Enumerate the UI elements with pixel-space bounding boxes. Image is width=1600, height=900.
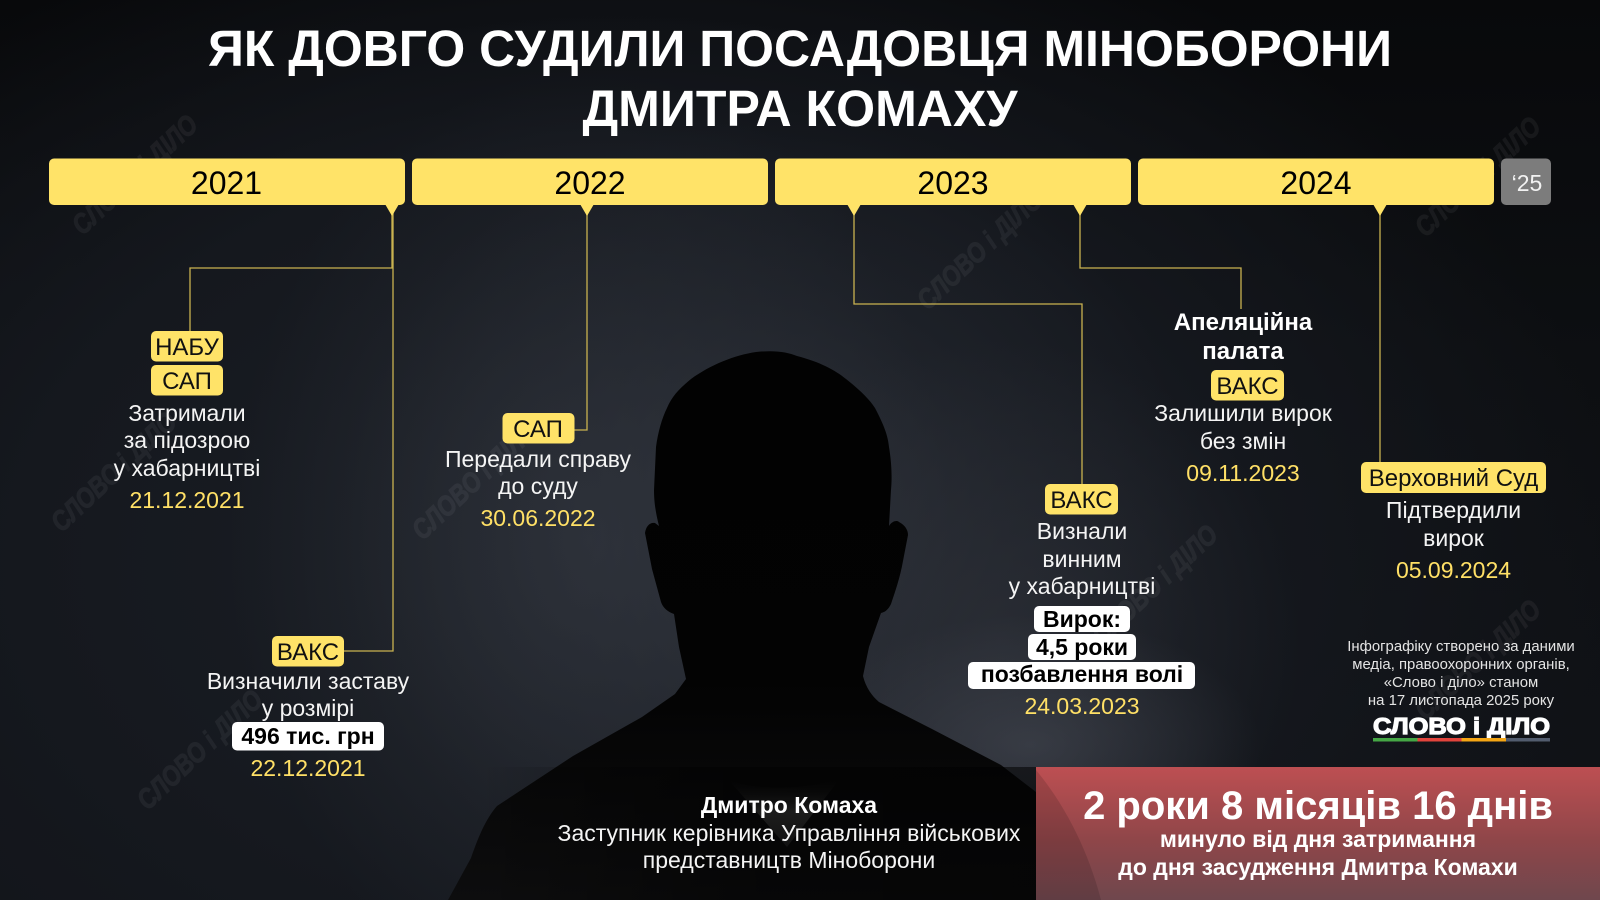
timeline bar: 2023	[775, 158, 1131, 216]
timeline bar: 2021: 2021	[191, 165, 262, 201]
event: bail 22.12.2021: 22.12.2021	[250, 755, 366, 781]
watermarks	[45, 109, 1547, 816]
silhouette of the official	[448, 351, 1036, 900]
event: appeal 09.11.2023: 09.11.2023	[1186, 460, 1300, 486]
event: verdict 24.03.2023: ВАКС	[1050, 487, 1113, 514]
source note: «Слово і діло» станом	[1384, 675, 1538, 691]
watermarks: СЛОВО і ДІЛО	[131, 684, 269, 816]
event: case sent to court 30.06.2022: САП	[513, 416, 563, 443]
event: bail 22.12.2021: ВАКС	[277, 639, 339, 666]
panel: duration callout: 2 роки 8 місяців 16 днів	[1083, 784, 1553, 828]
event: bail 22.12.2021: у розмірі	[262, 695, 354, 721]
watermarks: СЛОВО і ДІЛО	[1086, 519, 1224, 651]
event: detained 21.12.2021: САП	[162, 368, 212, 395]
event: appeal 09.11.2023: без змін	[1200, 428, 1286, 454]
event: verdict 24.03.2023: позбавлення волі	[981, 661, 1183, 687]
event: detained 21.12.2021: у хабарництві	[114, 455, 260, 481]
event: Supreme Court 05.09.2024: вирок	[1423, 525, 1485, 551]
event: case sent to court 30.06.2022	[445, 413, 632, 531]
watermarks: СЛОВО і ДІЛО	[1409, 111, 1547, 243]
event: verdict 24.03.2023: 4,5 роки	[1036, 634, 1128, 660]
event: Supreme Court 05.09.2024: 05.09.2024	[1396, 557, 1511, 583]
event: appeal 09.11.2023: ВАКС	[1216, 373, 1279, 400]
source note: Інфографіку створено за даними	[1347, 639, 1575, 655]
event: verdict 24.03.2023	[968, 484, 1195, 719]
watermarks: СЛОВО і ДІЛО	[66, 109, 204, 241]
event: detained 21.12.2021: за підозрою	[124, 427, 250, 453]
timeline bar: 2024	[1138, 158, 1494, 216]
event: Supreme Court 05.09.2024: Верховний Суд	[1369, 465, 1538, 492]
event: case sent to court 30.06.2022: Передали справу	[445, 446, 632, 472]
person caption: представництв Міноборони	[643, 847, 935, 873]
event: appeal 09.11.2023: Апеляційна	[1174, 309, 1313, 336]
event: detained 21.12.2021: Затримали	[128, 400, 246, 426]
panel: duration callout	[1036, 767, 1600, 900]
person caption: Дмитро Комаха	[701, 792, 877, 818]
connector lines	[190, 212, 1380, 651]
event: appeal 09.11.2023	[1154, 309, 1333, 486]
panel: duration callout: до дня засудження Дмитра Комахи	[1118, 854, 1518, 880]
event: detained 21.12.2021: НАБУ	[155, 334, 220, 361]
event: appeal 09.11.2023: палата	[1202, 338, 1284, 365]
title: ЯК ДОВГО СУДИЛИ ПОСАДОВЦЯ МІНОБОРОНИ	[208, 20, 1392, 77]
event: appeal 09.11.2023: Залишили вирок	[1154, 400, 1333, 426]
event: verdict 24.03.2023: винним	[1042, 546, 1122, 572]
timeline bar: 2022	[412, 158, 768, 216]
event: detained 21.12.2021: 21.12.2021	[129, 487, 245, 513]
watermarks: СЛОВО і ДІЛО	[1409, 594, 1547, 726]
event: detained 21.12.2021	[114, 331, 260, 513]
source note	[1347, 639, 1575, 709]
source note: медіа, правоохоронних органів,	[1352, 657, 1570, 673]
person caption: Заступник керівника Управління військових	[558, 820, 1021, 846]
event: verdict 24.03.2023: 24.03.2023	[1024, 693, 1140, 719]
panel: duration callout: минуло від дня затримання	[1160, 826, 1476, 852]
event: case sent to court 30.06.2022: до суду	[498, 473, 578, 499]
event: verdict 24.03.2023: Визнали	[1037, 518, 1127, 544]
event: verdict 24.03.2023: Вирок:	[1043, 606, 1121, 632]
event: bail 22.12.2021: Визначили заставу	[207, 668, 410, 694]
event: Supreme Court 05.09.2024: Підтвердили	[1386, 497, 1521, 523]
title	[208, 20, 1392, 137]
timeline bar: 2023: 2023	[917, 165, 989, 201]
logo: Слово і діло: СЛОВО і ДІЛО	[1373, 713, 1550, 739]
timeline bar: 2022: 2022	[554, 165, 626, 201]
event: Supreme Court 05.09.2024	[1361, 462, 1546, 583]
event: bail 22.12.2021: 496 тис. грн	[241, 723, 375, 749]
event: bail 22.12.2021	[207, 636, 410, 781]
title: ДМИТРА КОМАХУ	[582, 80, 1019, 137]
caption strip	[480, 767, 1036, 900]
event: verdict 24.03.2023: у хабарництві	[1009, 573, 1155, 599]
person caption	[558, 792, 1021, 873]
timeline bar: 2021	[49, 158, 405, 216]
timeline bar: 2025: ‘25	[1512, 170, 1542, 196]
watermarks: СЛОВО і ДІЛО	[406, 414, 544, 546]
timeline bar: 2024: 2024	[1280, 165, 1352, 201]
watermarks: СЛОВО і ДІЛО	[911, 184, 1049, 316]
source note: на 17 листопада 2025 року	[1368, 693, 1555, 709]
timeline bar: 2025	[1501, 158, 1551, 205]
event: case sent to court 30.06.2022: 30.06.2022	[480, 505, 596, 531]
watermarks: СЛОВО і ДІЛО	[45, 406, 183, 538]
